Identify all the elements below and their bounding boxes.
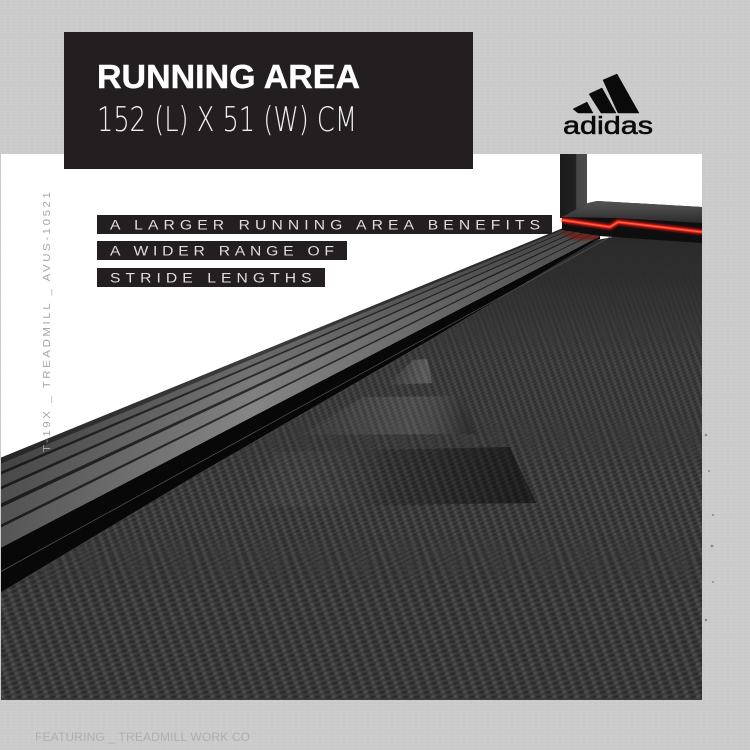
side rail ribs: [0, 213, 610, 572]
title box: [64, 32, 473, 169]
running belt: [0, 230, 707, 705]
line 3: STRIDE LENGTHS: [110, 271, 312, 286]
title: running area: RUNNING AREA: [97, 58, 360, 95]
line 2: A WIDER RANGE OF: [110, 244, 334, 259]
faint distressed footer text: FEATURING _ TREADMILL WORK CO: [35, 730, 250, 744]
vertical model code: T-19X _ TREADMILL _ AVUS-10521: [42, 192, 53, 452]
console deck: [562, 201, 702, 243]
line 1: A LARGER RUNNING AREA BENEFITS: [110, 218, 540, 233]
belt logo stripes: [337, 359, 536, 505]
red light strip: [562, 220, 702, 232]
callout: benefit text: [97, 215, 552, 287]
adidas logo: adidas: [563, 112, 653, 140]
faint distressed specks on right margin: [705, 434, 714, 621]
side rail black base: [0, 236, 600, 593]
treadmill photo panel: [0, 154, 707, 705]
adidas logo: [563, 74, 653, 140]
upright post: [560, 154, 587, 218]
subtitle: dimensions: 152 (L) X 51 (W) CM: [97, 100, 357, 140]
icon: three bars: [573, 74, 639, 113]
